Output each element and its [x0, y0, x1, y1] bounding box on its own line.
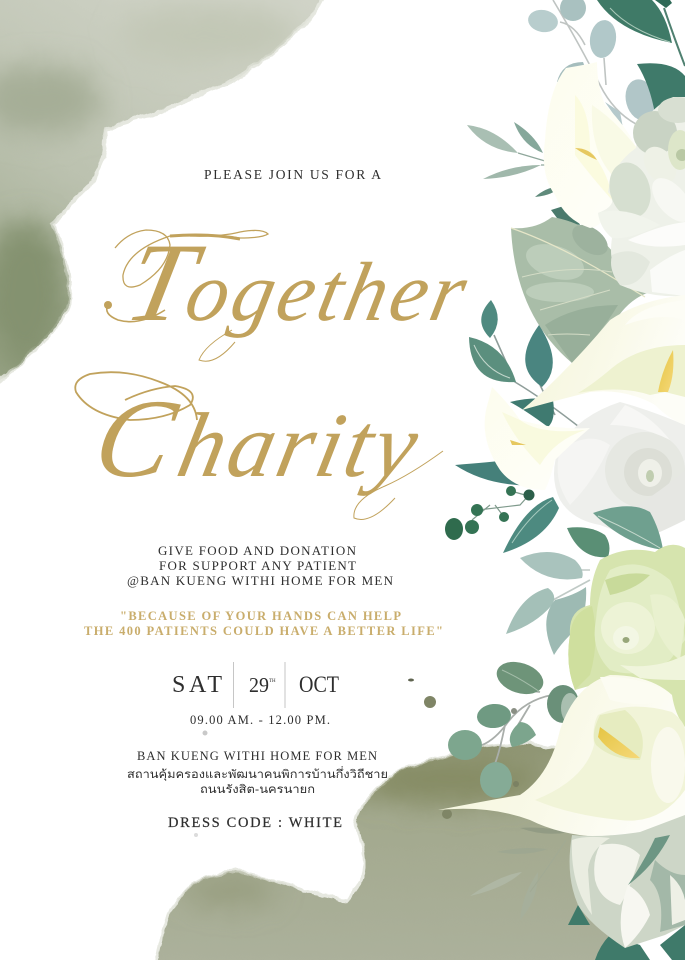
- gold quote: "BECAUSE OF YOUR HANDS CAN HELP: [120, 609, 401, 623]
- intro text: [127, 543, 394, 588]
- venue: สถานคุ้มครองและพัฒนาคนพิการบ้านกึ่งวิถีชาย: [127, 766, 388, 781]
- paint splatter dots: [194, 678, 519, 837]
- watercolor blob: bottom: [150, 743, 640, 960]
- leaves: teal branch: [455, 300, 617, 485]
- leaves: eucalyptus top: [526, 0, 661, 128]
- title: Charity: harity: [170, 395, 430, 497]
- date row: TH: [269, 679, 276, 684]
- green rose: [568, 545, 685, 745]
- heading: please join us: PLEASE JOIN US FOR A: [204, 167, 381, 182]
- title: Together: ogether: [178, 246, 478, 339]
- title: Together: T: [117, 221, 212, 345]
- dark leaves: bottom: [568, 905, 685, 960]
- watercolor blob: top left: [0, 0, 326, 405]
- venue: [127, 749, 388, 796]
- intro text: GIVE FOOD AND DONATION: [158, 543, 357, 558]
- calla lily: large middle: [522, 295, 685, 425]
- date row: [172, 662, 339, 708]
- gold quote: [84, 609, 443, 638]
- date row: SAT: [172, 672, 222, 698]
- calla lily: large bottom: [438, 675, 685, 837]
- venue: BAN KUENG WITHI HOME FOR MEN: [137, 749, 377, 763]
- white peony: [598, 97, 685, 296]
- title: Charity: C: [85, 377, 187, 501]
- white rose: [554, 402, 685, 540]
- dress code: DRESS CODE : WHITE: [168, 815, 342, 831]
- white-green flower: bottom: [570, 815, 685, 948]
- time: 09.00 AM. - 12.00 PM.: [190, 713, 330, 727]
- intro text: FOR SUPPORT ANY PATIENT: [159, 558, 356, 573]
- venue: ถนนรังสิต-นครนายก: [200, 783, 315, 796]
- date row: OCT: [299, 672, 339, 697]
- faint leaves on blob: [470, 828, 570, 920]
- berries and sprig: [445, 486, 559, 553]
- leaves: dark green top: [597, 0, 685, 114]
- intro text: @BAN KUENG WITHI HOME FOR MEN: [127, 573, 394, 588]
- calla lily: top: [544, 62, 637, 228]
- calla lily: small: [485, 387, 590, 490]
- leaves: olive sprig: [467, 122, 559, 197]
- big sage leaf: [511, 204, 650, 363]
- title: Charity: [75, 372, 443, 519]
- title: Together: [104, 221, 483, 361]
- eucalyptus leaves: bottom sprig: [448, 656, 579, 798]
- stems: [482, 0, 642, 770]
- leaves: right middle: [506, 506, 663, 655]
- date row: 29: [249, 673, 269, 697]
- gold quote: THE 400 PATIENTS COULD HAVE A BETTER LIFE": [84, 624, 443, 638]
